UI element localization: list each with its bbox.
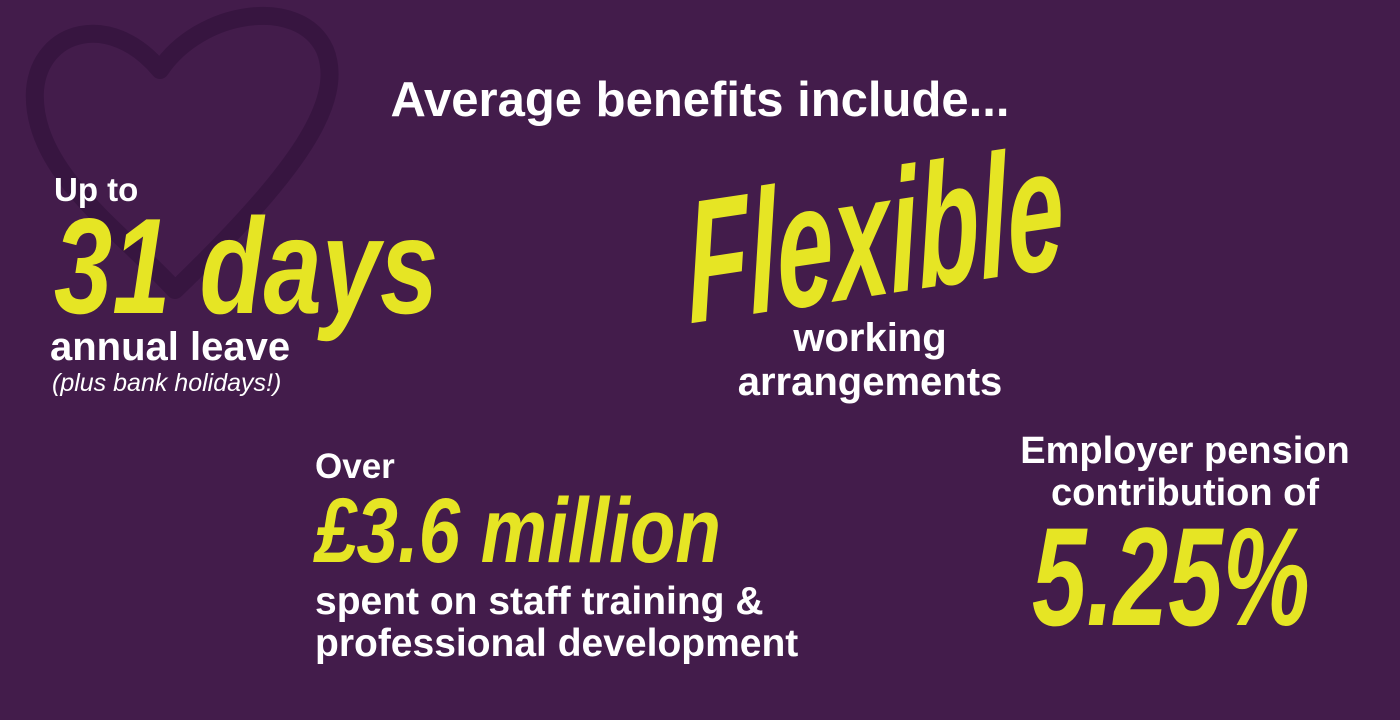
text: up to: Up to	[54, 171, 138, 208]
text: 3.6 million: £3.6 million	[315, 480, 721, 582]
text: employer pension contribution	[1020, 430, 1350, 514]
text: flexible: Flexible	[682, 110, 1068, 361]
text: employer pension contribution: contribution of	[1051, 472, 1319, 514]
text: working arrangements: working	[793, 316, 947, 360]
text: 31 days: 31 days	[54, 190, 438, 342]
panel: annual leave	[50, 171, 438, 397]
text: spent on staff training	[315, 580, 798, 665]
text: working arrangements	[738, 316, 1002, 404]
text: annual leave: annual leave	[50, 325, 290, 369]
icon: heart outline	[26, 7, 338, 299]
text: 5.25%: 5.25%	[1032, 498, 1310, 655]
text: working arrangements: arrangements	[738, 360, 1002, 404]
title: Average benefits include...	[390, 73, 1010, 127]
panel: flexible working	[682, 110, 1068, 404]
text: spent on staff training: professional development	[315, 622, 798, 665]
text: employer pension contribution: Employer pension	[1020, 430, 1350, 472]
panel: training spend	[313, 447, 798, 665]
text: over: Over	[315, 447, 395, 486]
text: plus bank holidays: (plus bank holidays!)	[52, 369, 281, 397]
text: spent on staff training: spent on staff training &	[315, 580, 764, 623]
panel: pension	[1020, 430, 1350, 655]
